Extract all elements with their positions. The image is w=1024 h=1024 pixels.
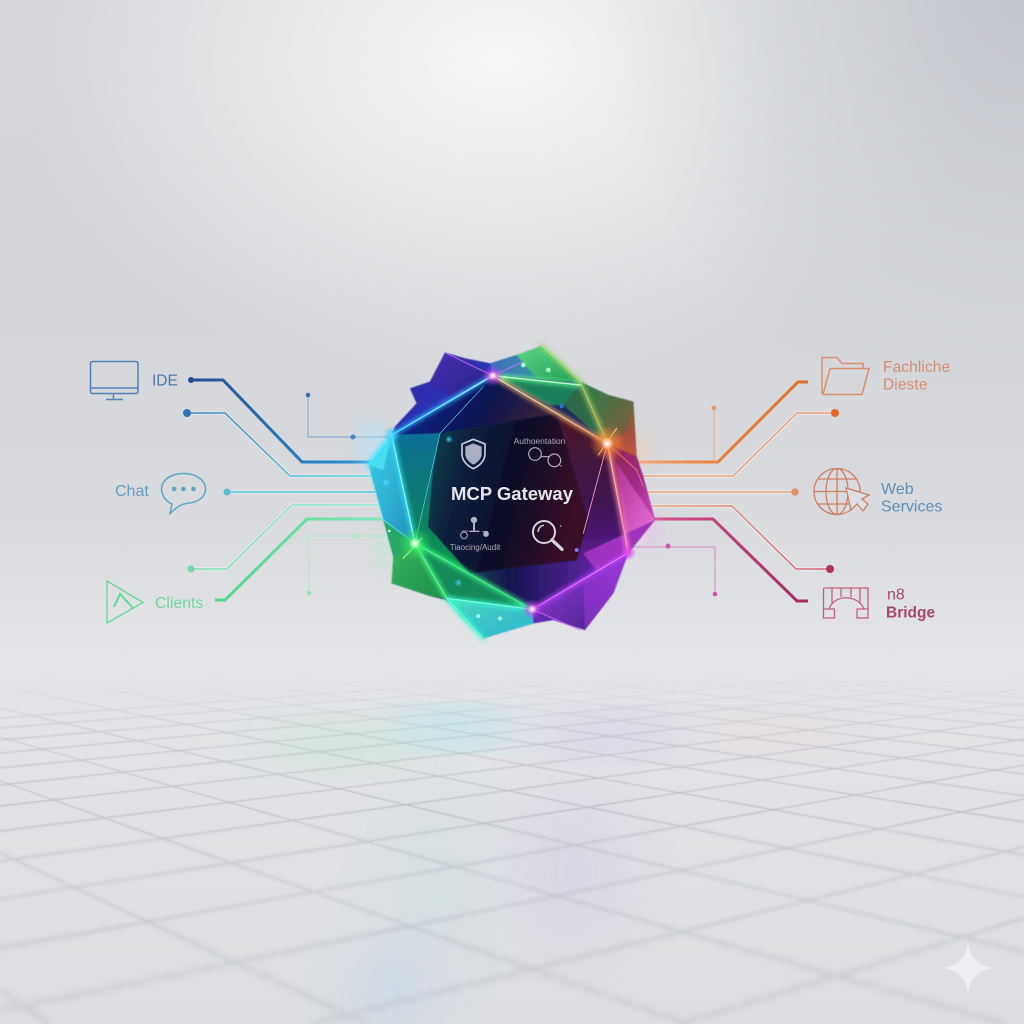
icon: magnifier [533, 521, 562, 549]
label: Chat: Chat [115, 483, 149, 500]
icon: tracing nodes [461, 517, 488, 539]
crystal label: MCP Gateway: MCP Gateway [451, 483, 574, 504]
icon: globe with cursor [814, 468, 869, 514]
icon: monitor [90, 362, 138, 400]
icon: bridge [824, 588, 868, 618]
icon: authentication link [529, 448, 562, 467]
label: n8 Bridge: Bridge [886, 604, 935, 622]
label: Fachliche Dieste: Fachliche [883, 359, 950, 376]
floor colour reflections [260, 716, 850, 1024]
icon: corner sparkle [944, 944, 992, 992]
right connectors [630, 382, 839, 601]
connector: lower green thin [188, 505, 380, 572]
crystal halo [356, 421, 660, 568]
label: Fachliche Dieste: Dieste [883, 376, 928, 394]
label: n8 Bridge [886, 586, 935, 622]
central crystal [368, 346, 655, 638]
branch: upper small [306, 393, 392, 440]
label: n8 Bridge: n8 [887, 586, 905, 604]
connector: n8 bridge [652, 519, 808, 601]
label: Web Services: Services [881, 498, 942, 516]
left labels and icons [90, 362, 206, 623]
dark core panel [428, 413, 588, 573]
connector: web services [645, 488, 799, 496]
label: Web Services: Web [881, 481, 914, 498]
floor perspective grid [0, 694, 1024, 1024]
node sparkles [383, 365, 636, 620]
connector: upper orange thin [640, 409, 839, 476]
branch: lower small [307, 534, 392, 595]
left connectors [183, 377, 392, 600]
connector: lower thin [645, 506, 834, 573]
icon: shield [462, 439, 485, 469]
branch: lower small [630, 544, 717, 596]
label: Web Services [881, 481, 942, 516]
connector: chat [224, 488, 380, 496]
icon: clients play triangle [107, 581, 143, 623]
icon: chat bubble [162, 474, 206, 514]
label: Fachliche Dieste [883, 359, 950, 394]
connector: clients [215, 519, 382, 600]
right labels and icons [814, 358, 950, 622]
connector: upper blue thin [183, 409, 375, 476]
small light particles [381, 363, 579, 620]
glowing edges [368, 346, 643, 638]
label: IDE: IDE [152, 372, 178, 390]
icon: folder [822, 358, 869, 394]
branch: upper small [712, 406, 716, 462]
label: Clients: Clients [155, 595, 203, 612]
crystal label: Tracing/Audit: Tiaocing/Audit [450, 543, 501, 552]
crystal label: Authentication: Authoentation [514, 436, 566, 446]
connector: Fachliche Dieste [637, 382, 808, 462]
crystal facets [368, 346, 655, 638]
connector: IDE [188, 377, 372, 462]
